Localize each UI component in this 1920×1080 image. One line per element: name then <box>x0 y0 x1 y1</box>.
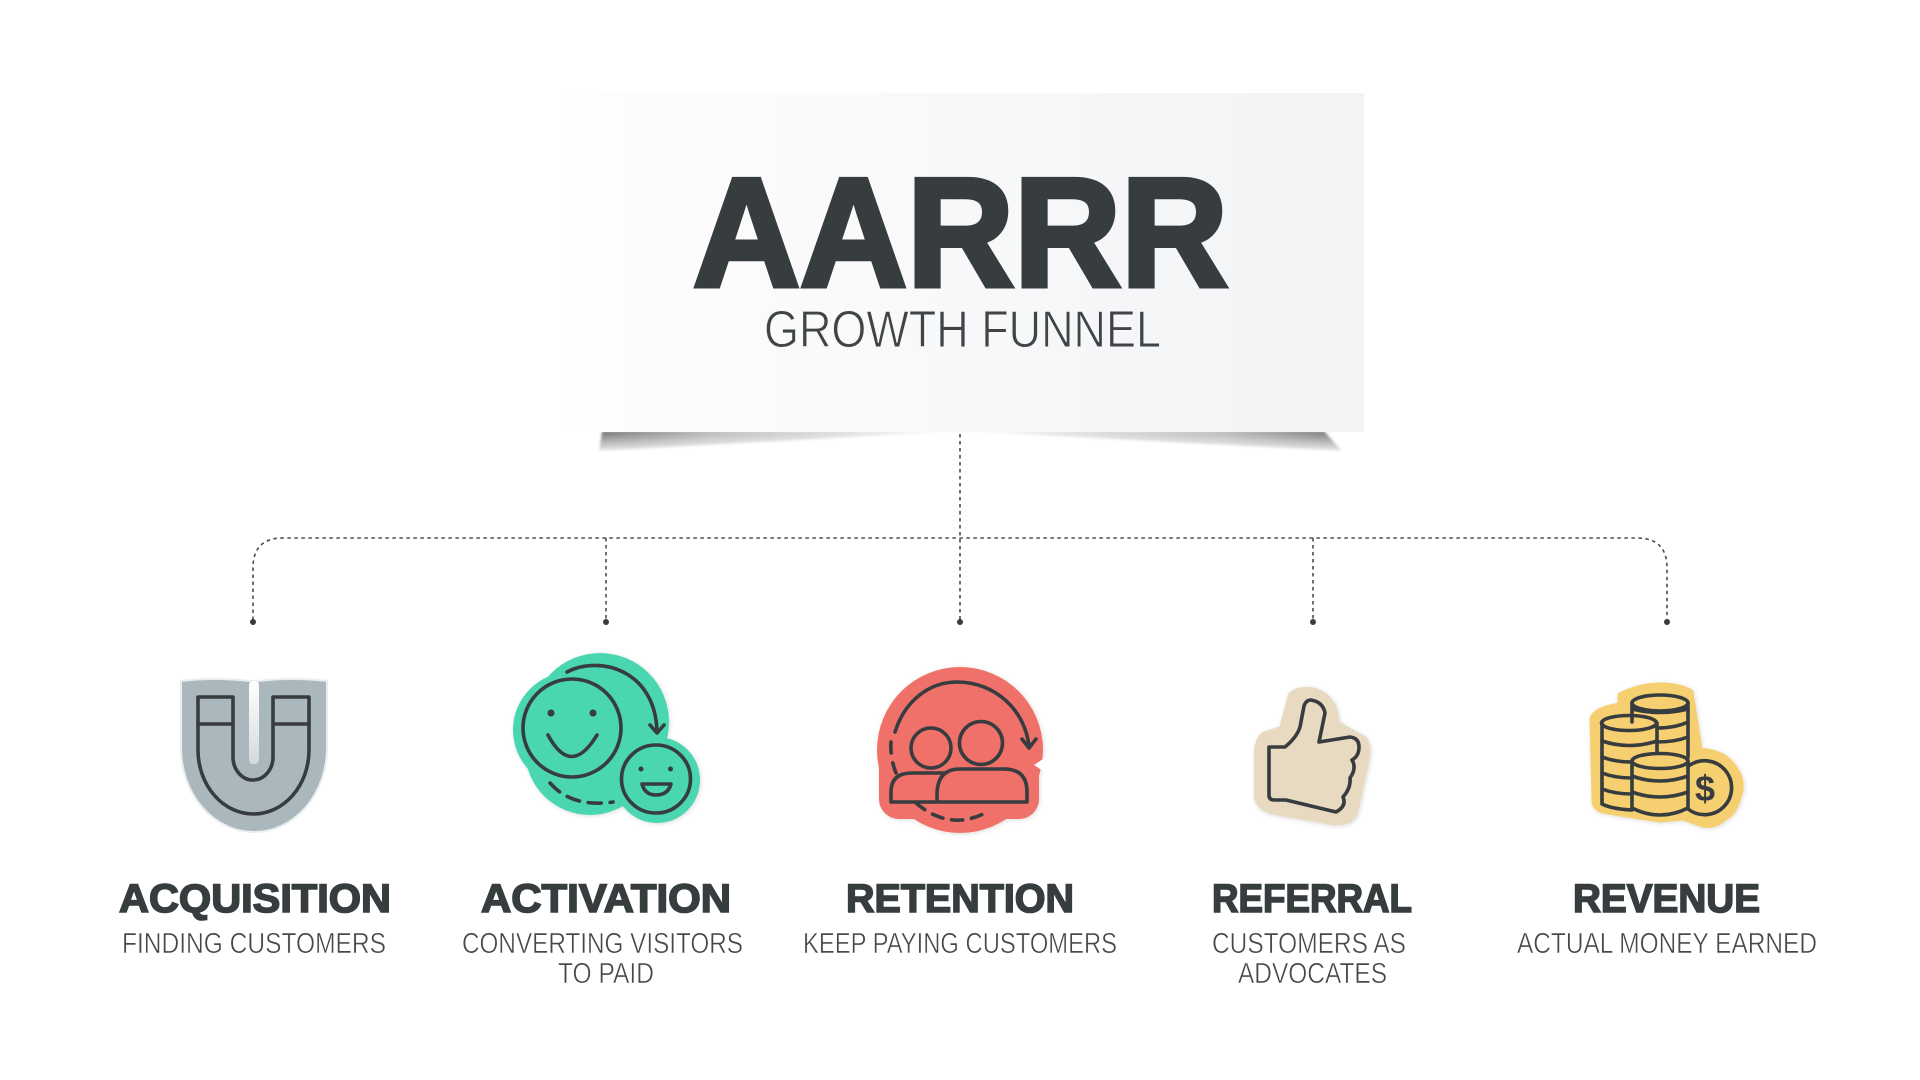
column: retention: RETENTION <box>846 877 1074 921</box>
column: referral: ADVOCATES <box>1238 958 1387 990</box>
column: referral: CUSTOMERS AS <box>1212 928 1406 960</box>
icon: magnet <box>181 679 327 832</box>
column: acquisition: FINDING CUSTOMERS <box>122 928 386 960</box>
column: revenue: ACTUAL MONEY EARNED <box>1517 928 1817 960</box>
column: retention: KEEP PAYING CUSTOMERS <box>803 928 1117 960</box>
column: retention <box>803 877 1117 960</box>
column: revenue <box>1517 877 1817 960</box>
icon: coin stacks <box>1592 685 1741 825</box>
icon: thumbs up <box>1257 690 1368 822</box>
column: acquisition: ACQUISITION <box>119 877 391 921</box>
title: AARRR <box>693 146 1228 319</box>
column: referral: REFERRAL <box>1212 877 1412 921</box>
panel: title card <box>555 93 1364 432</box>
panel: title card shadow <box>590 431 1350 453</box>
column: activation: ACTIVATION <box>481 877 731 921</box>
column: activation: TO PAID <box>558 958 654 990</box>
icon: retention people <box>877 667 1046 833</box>
column: referral <box>1212 877 1412 990</box>
icon: coin stacks: $ <box>1695 768 1715 809</box>
subtitle: GROWTH FUNNEL <box>764 301 1161 359</box>
column: acquisition <box>119 877 391 960</box>
column: activation <box>462 877 743 990</box>
column: activation: CONVERTING VISITORS <box>462 928 743 960</box>
icon: activation faces <box>513 653 700 823</box>
dotted connector tree <box>250 434 1670 625</box>
column: revenue: REVENUE <box>1573 877 1760 921</box>
